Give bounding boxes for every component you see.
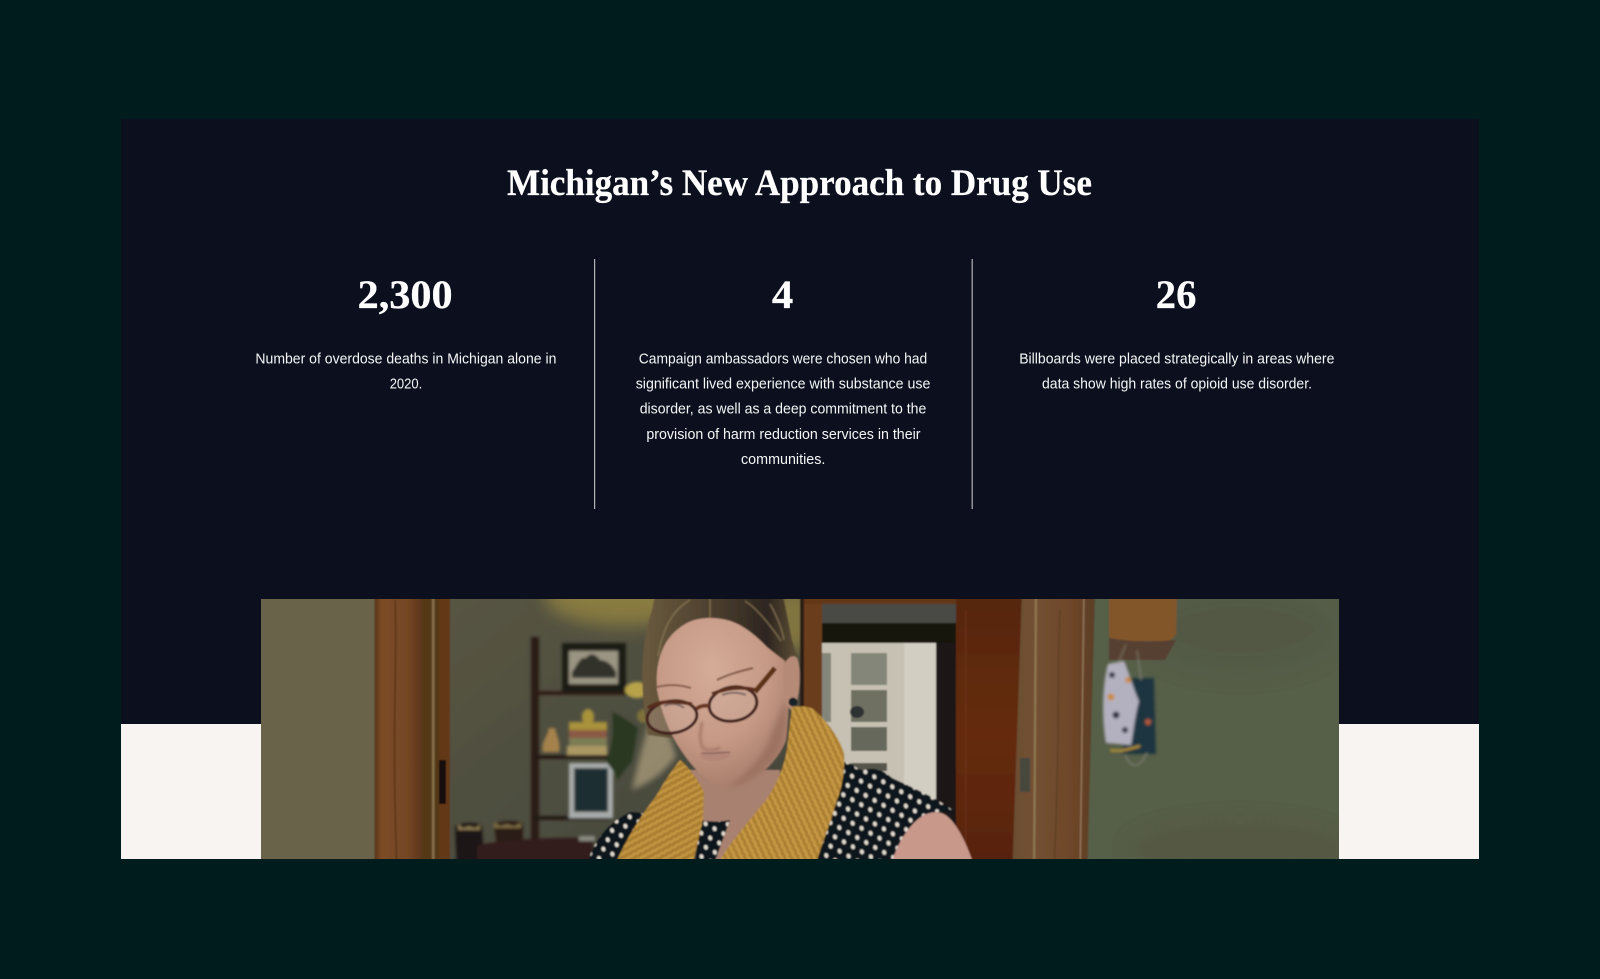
number: 26: 26 (1156, 272, 1196, 317)
face mask hanging on the wall (1103, 644, 1156, 765)
wooden door (956, 590, 1022, 880)
bare arm (892, 810, 974, 859)
cheek shadow (738, 705, 787, 783)
woman's face (657, 618, 788, 787)
left door frame (374, 590, 450, 880)
dress: right shoulder (818, 761, 952, 859)
text: campaign ambassadors description (636, 352, 930, 468)
text: billboards description: Billboards were placed strategically in areas where (1019, 352, 1334, 368)
number: 4: 4 (772, 272, 793, 317)
divider: right (972, 259, 973, 509)
panel: statistic 26 (1019, 272, 1334, 393)
text: campaign ambassadors description: provision of harm reduction services in their (646, 427, 921, 443)
panel: cream band (121, 724, 1479, 859)
text: campaign ambassadors description: Campaign ambassadors were chosen who had (639, 352, 927, 368)
shelf and decor (529, 636, 646, 840)
text: overdose deaths description: 2020. (390, 377, 422, 393)
text: campaign ambassadors description: communities. (741, 452, 825, 468)
right wall (1087, 599, 1339, 859)
photo background: left wall (261, 599, 376, 859)
number: 2,300: 2,300 (358, 272, 453, 317)
infographic canvas (121, 119, 1479, 859)
doorway with white cabinet (799, 599, 958, 826)
text: overdose deaths description: Number of overdose deaths in Michigan alone in (255, 352, 556, 368)
text: overdose deaths description (255, 352, 556, 393)
text: billboards description: data show high rates of opioid use disorder. (1042, 377, 1312, 393)
dress: left (589, 812, 644, 859)
photo background: centre wall (449, 599, 802, 859)
text: billboards description (1019, 352, 1334, 393)
dress: neckline (695, 819, 730, 859)
panel: statistic 2,300 (255, 272, 556, 393)
woman's hair (642, 590, 798, 740)
yellow knit scarf (616, 705, 846, 859)
panel: dark card (121, 119, 1479, 724)
hair parting and strands (658, 599, 784, 656)
wooden wall hanging (1108, 599, 1178, 660)
ear and earring (783, 656, 800, 710)
photo: woman in a home interior looking down (261, 599, 1339, 859)
woman's neck (690, 770, 780, 860)
title: Michigan’s New Approach to Drug Use (507, 163, 1092, 204)
dining chairs and table (454, 820, 596, 859)
divider: left (594, 259, 595, 509)
panel: statistic 4 (636, 272, 930, 468)
glasses (645, 668, 775, 736)
loose hair strand (632, 720, 676, 790)
right door frame (1012, 590, 1095, 880)
text: campaign ambassadors description: disorder, as well as a deep commitment to the (640, 402, 926, 418)
facial features (657, 668, 753, 761)
text: campaign ambassadors description: significant lived experience with substance use (636, 377, 930, 393)
